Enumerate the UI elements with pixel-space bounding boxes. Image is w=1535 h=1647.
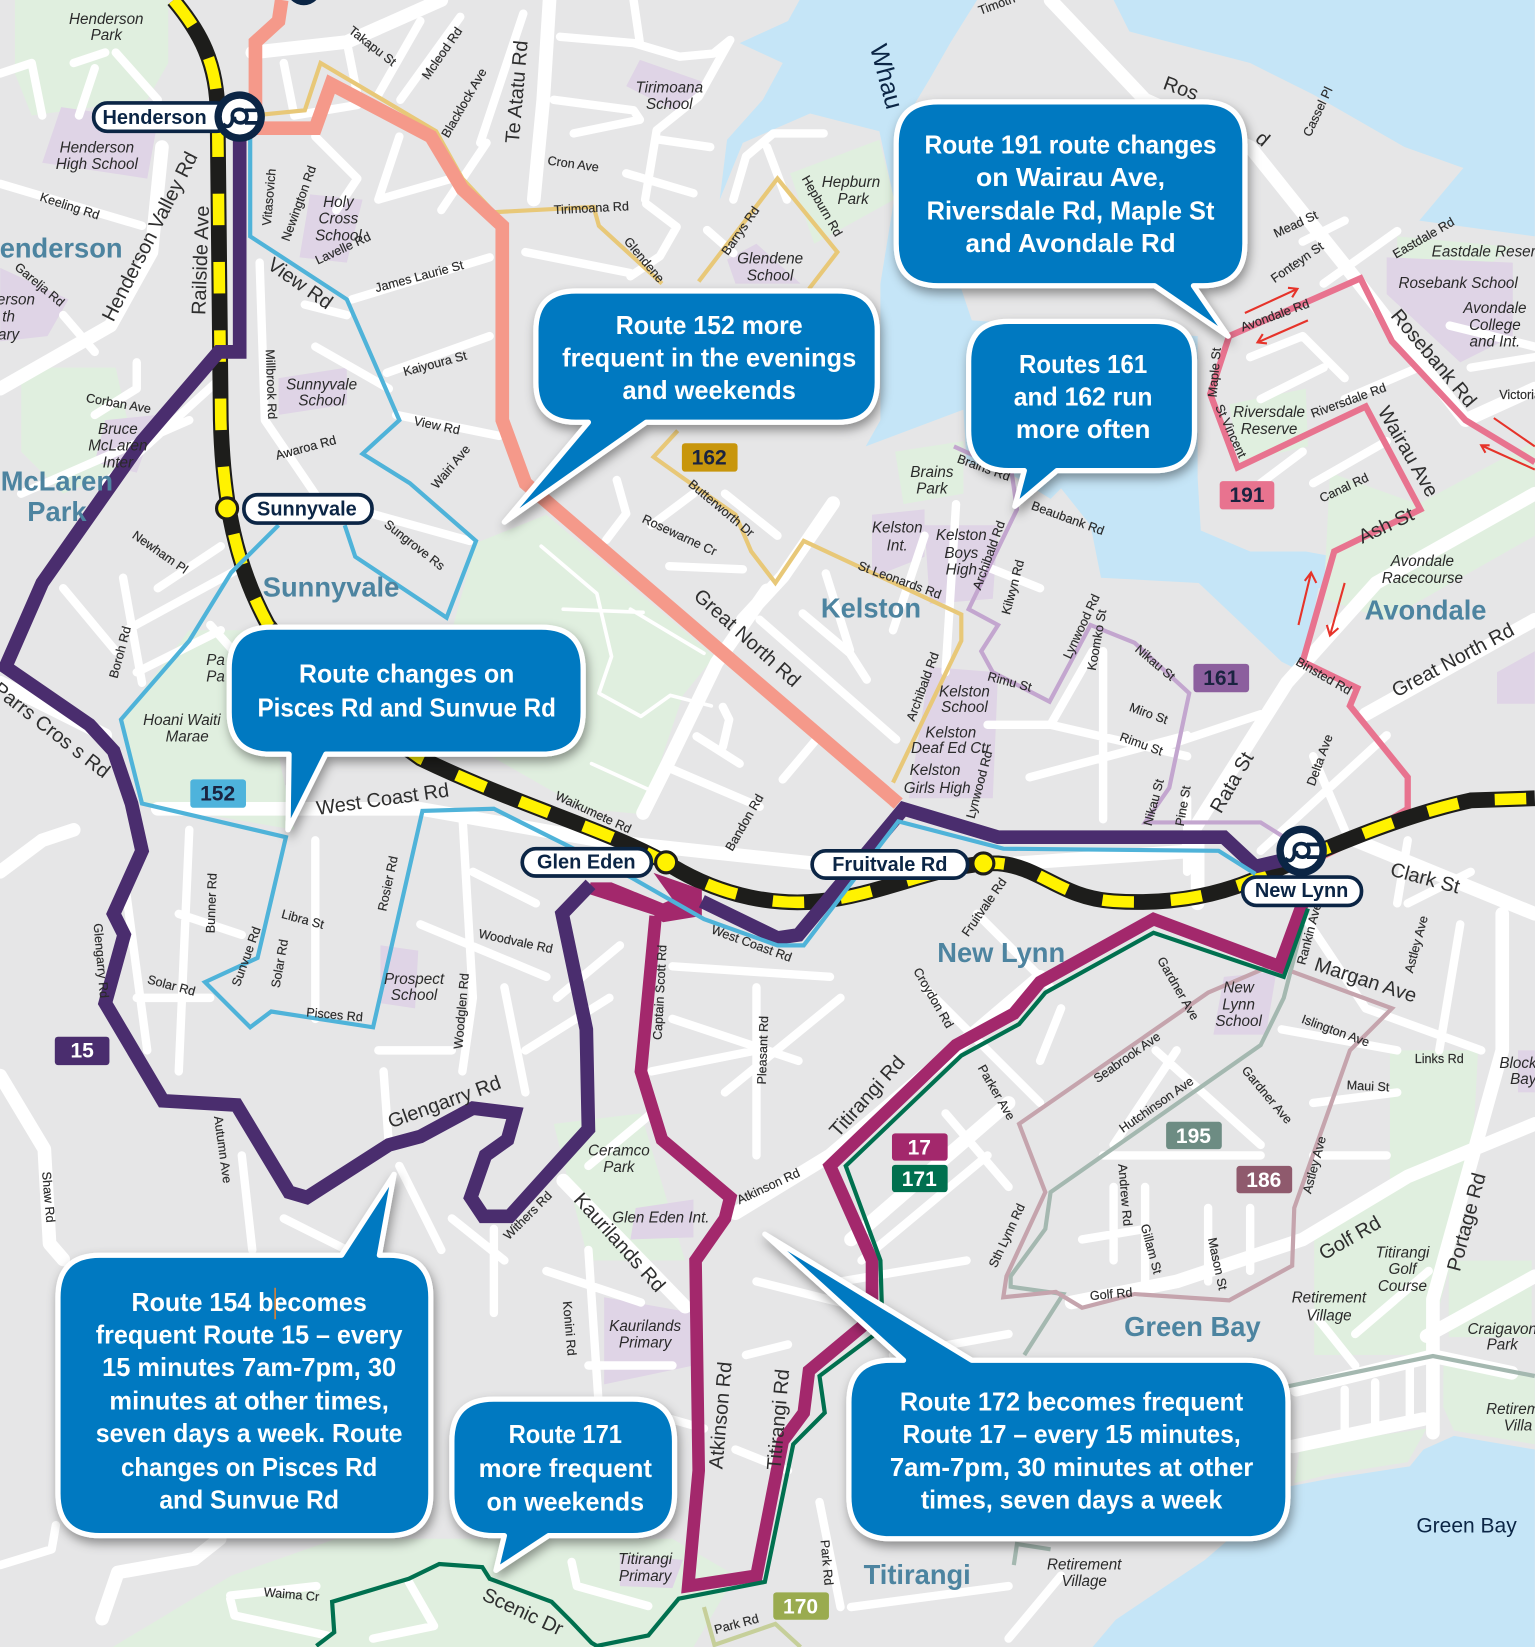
school and park labels: Park <box>603 1159 636 1176</box>
major road labels: Great North Rd <box>1388 619 1518 702</box>
road labels: Barrys Rd <box>719 204 762 258</box>
callout: route 154 becomes route 15: seven days a week. Route <box>96 1420 402 1448</box>
Great North Rd route line <box>255 0 898 804</box>
school and park labels: Lynn <box>1222 996 1255 1013</box>
road labels: Lavelle Rd <box>313 230 373 267</box>
road labels: Konini Rd <box>560 1301 579 1356</box>
suburb names: Titirangi <box>864 1559 971 1590</box>
callout: routes 161 and 162 <box>969 321 1194 506</box>
school and park labels: Girls High <box>904 780 971 797</box>
major road labels: Margan Ave <box>1312 954 1419 1007</box>
road labels: Parker Ave <box>975 1062 1018 1123</box>
school and park labels: School <box>747 267 794 284</box>
major road labels: Rata St <box>1206 748 1259 817</box>
road labels: Blacklock Ave <box>439 66 490 140</box>
school and park labels: Park <box>91 27 123 44</box>
route 15 line <box>5 137 1301 1216</box>
railway line <box>174 0 1535 902</box>
route 191 line <box>1210 278 1535 856</box>
road labels: Koomko St <box>1085 608 1109 672</box>
road labels: Butterworth Dr <box>686 477 757 540</box>
station: Glen Eden <box>522 849 677 876</box>
route 162 line <box>252 63 961 783</box>
school and park labels: School <box>941 699 988 716</box>
callout: route 172 becomes route 17: times, seven days a week <box>921 1486 1223 1514</box>
road labels: Nikau St <box>1141 777 1167 827</box>
road labels: Atkinson Rd <box>735 1166 802 1207</box>
major road labels: Clark St <box>1388 859 1463 899</box>
school and park labels: Int. <box>887 537 908 554</box>
station: New Lynn: New Lynn <box>1255 880 1348 902</box>
route number badges: 170 <box>783 1595 818 1618</box>
road labels: Gardner Ave <box>1154 954 1202 1023</box>
road labels: Takapu St <box>346 23 399 69</box>
station: Henderson <box>94 91 265 142</box>
school and park labels: Tirimoana <box>636 79 703 96</box>
road labels: Mason St <box>1205 1236 1230 1292</box>
route number badges: 161 <box>1203 667 1239 690</box>
school and park labels: Boys <box>944 545 979 562</box>
station: Sunnyvale <box>217 495 372 523</box>
school and park labels: Kelston <box>936 527 987 544</box>
station: New Lynn <box>1243 826 1361 905</box>
callout: route 171 <box>452 1399 675 1570</box>
suburb names: Green Bay <box>1124 1311 1261 1342</box>
school and park labels: High <box>946 562 977 579</box>
road labels: Boroh Rd <box>107 625 134 680</box>
road labels: Rankin Ave <box>1294 901 1324 966</box>
road labels: Eastdale Rd <box>1390 215 1457 261</box>
road labels: Pleasant Rd <box>755 1016 771 1085</box>
road labels: Glengarry Rd <box>91 923 111 999</box>
road labels: Keeling Rd <box>38 190 101 222</box>
road labels: Pine St <box>1173 784 1194 827</box>
road labels: St Vincent <box>1212 402 1249 460</box>
road labels: Islington Ave <box>1300 1012 1371 1050</box>
road labels: Binsted Rd <box>1293 655 1354 698</box>
school and park labels: Villa <box>1504 1418 1532 1435</box>
school and park labels: Avondale <box>1390 553 1454 570</box>
school and park labels: Primary <box>619 1335 673 1352</box>
major road labels: Portage Rd <box>1443 1171 1491 1274</box>
road labels: Lynwood Rd <box>964 749 995 820</box>
school and park labels: Glendene <box>737 251 803 268</box>
route number badges: 195 <box>1176 1125 1211 1148</box>
callout: route 171: Route 171 <box>509 1421 622 1449</box>
road labels: Riversdale Rd <box>1309 381 1388 421</box>
major road labels: Rosebank Rd <box>1386 305 1481 412</box>
callout: route 171: more frequent <box>479 1455 652 1483</box>
road labels: Shaw Rd <box>39 1171 57 1223</box>
station: Sunnyvale: Sunnyvale <box>257 499 357 521</box>
school and park labels: School <box>1215 1013 1262 1030</box>
road labels: Nikau St <box>1132 642 1178 684</box>
school and park labels: Kelston <box>872 520 923 537</box>
road labels: Waikumete Rd <box>553 789 633 836</box>
road labels: Glendene <box>621 235 667 285</box>
suburb names: Kelston <box>821 593 921 624</box>
route 17 line <box>588 873 1303 1586</box>
callout: route 154 becomes route 15: Route 154 becomes <box>131 1289 367 1317</box>
school and park labels: College <box>1469 317 1521 334</box>
road labels: Links Rd <box>1415 1052 1464 1066</box>
route number badges <box>55 443 1292 1620</box>
road labels: Millbrook Rd <box>263 349 279 420</box>
school and park labels: Kelston <box>910 762 960 779</box>
callout: routes 161 and 162: Routes 161 <box>1019 351 1147 379</box>
major road labels: Golf Rd <box>1315 1212 1385 1265</box>
road labels: Sunvue Rd <box>229 925 264 988</box>
school and park labels: Village <box>1306 1307 1352 1324</box>
school and park labels: Craigavon <box>1468 1321 1535 1338</box>
callout: route 154 becomes route 15: minutes at other times, <box>109 1388 389 1416</box>
school and park labels: Kaurilands <box>609 1318 681 1335</box>
road labels: Archibald Rd <box>970 519 1008 592</box>
school and park labels: Prospect <box>384 971 445 988</box>
major road labels: Ros <box>1160 72 1201 105</box>
road labels: Archibald Rd <box>904 650 942 723</box>
callout: route 154 becomes route 15: frequent Route 15 – every <box>96 1321 403 1349</box>
major road labels: Titirangi Rd <box>763 1368 794 1471</box>
school and park labels: School <box>298 392 345 409</box>
road labels: Gardner Ave <box>1239 1064 1295 1127</box>
road labels: Hepburn Rd <box>799 173 845 239</box>
callout: route 152: and weekends <box>623 377 796 405</box>
road labels: Rimu St <box>1118 730 1165 759</box>
road labels: Sungrove Rs <box>381 517 447 573</box>
major road labels: Titirangi Rd <box>826 1052 910 1142</box>
school and park labels: McLaren <box>88 438 147 455</box>
road labels: Rosewarne Cr <box>640 512 719 559</box>
road labels: Croydon Rd <box>910 965 956 1031</box>
road labels: Waima Cr <box>263 1585 320 1604</box>
road labels: Captain Scott Rd <box>651 944 670 1040</box>
school and park labels: Inter <box>103 454 134 471</box>
road labels: Hutchinson Ave <box>1117 1074 1196 1136</box>
callout: route 172 becomes route 17 <box>765 1234 1288 1539</box>
callout: route 152: frequent in the evenings <box>562 345 856 373</box>
major road labels: Atkinson Rd <box>705 1361 737 1470</box>
callout: route 154 becomes route 15: changes on Pisces Rd <box>121 1454 377 1482</box>
road labels: Bandon Rd <box>723 792 766 853</box>
major road labels: Great North Rd <box>689 585 804 692</box>
road labels: Wairi Ave <box>429 442 473 492</box>
road labels: Mcleod Rd <box>419 25 465 82</box>
road labels: Awaroa Rd <box>274 433 338 463</box>
road labels: Pisces Rd <box>306 1005 363 1024</box>
major road labels: West Coast Rd <box>315 780 450 820</box>
station: Fruitvale Rd: Fruitvale Rd <box>832 854 947 876</box>
school and park labels: Hoani Waiti <box>143 712 221 729</box>
callout: Pisces Rd and Sunvue Rd route changes: Route changes on <box>299 661 514 689</box>
school and park labels: Avondale <box>1462 300 1526 317</box>
road labels: West Coast Rd <box>709 923 794 965</box>
route number badges: 191 <box>1229 484 1265 507</box>
road labels: Corban Ave <box>85 391 152 416</box>
callout: routes 161 and 162: more often <box>1016 416 1150 444</box>
school and park labels: Deaf Ed Ctr <box>911 740 991 757</box>
school and park labels: Pa <box>206 652 225 669</box>
major road labels: Railside Ave <box>188 205 214 315</box>
road labels: Maple St <box>1206 347 1224 398</box>
school and park labels: Holy <box>323 194 355 211</box>
callout: routes 161 and 162: and 162 run <box>1014 383 1152 411</box>
major road labels: Whau <box>864 41 908 112</box>
road labels: Gillam St <box>1138 1222 1165 1276</box>
road labels: Fruitvale Rd <box>959 876 1009 939</box>
major road labels: d <box>1251 127 1274 151</box>
road labels: Andrew Rd <box>1115 1163 1135 1227</box>
major road labels: Green Bay <box>1416 1515 1517 1538</box>
road labels: Newington Rd <box>279 164 319 243</box>
road labels: Garelja Rd <box>12 260 67 309</box>
school and park labels: Park <box>1487 1337 1519 1354</box>
school and park labels: Marae <box>166 729 209 746</box>
callout: route 191 <box>896 102 1245 336</box>
suburb names: New Lynn <box>937 937 1065 968</box>
route number badges: 17 <box>908 1136 931 1159</box>
route 186 line <box>1003 961 1392 1308</box>
major road labels: Te Atatu Rd <box>502 40 533 144</box>
route number badges: 152 <box>200 782 235 805</box>
suburb names: Sunnyvale <box>263 572 399 603</box>
school and park labels: Park <box>916 481 949 498</box>
road labels: Kaiyoura St <box>402 348 469 379</box>
callout: route 191: Riversdale Rd, Maple St <box>927 198 1215 226</box>
callout: route 191: and Avondale Rd <box>965 230 1176 258</box>
road labels: Avondale Rd <box>1239 297 1311 334</box>
major road labels: Kaurilands Rd <box>569 1189 669 1297</box>
road labels: Solar Rd <box>146 972 197 999</box>
road labels: Miro St <box>1127 700 1170 727</box>
callout: Pisces Rd and Sunvue Rd route changes: Pisces Rd and Sunvue Rd <box>258 694 556 722</box>
school and park labels: Glen Eden Int. <box>612 1210 710 1227</box>
road labels: Cron Ave <box>547 154 600 175</box>
road labels: Golf Rd <box>1089 1285 1133 1303</box>
road labels: Beaubank Rd <box>1029 499 1106 538</box>
school and park labels: Kelston <box>925 724 976 741</box>
school and park labels: School <box>646 96 693 113</box>
station: Fruitvale Rd <box>812 851 994 878</box>
road labels: Kilwyn Rd <box>999 558 1027 616</box>
school and park labels: Titirangi <box>618 1551 673 1568</box>
road labels: Solar Rd <box>269 938 291 989</box>
route 170 line <box>704 1607 801 1647</box>
route 152 line <box>121 137 1255 1027</box>
route 195 line <box>1011 924 1535 1565</box>
suburb names: enderson <box>0 232 123 263</box>
callout: route 191: on Wairau Ave, <box>976 164 1165 192</box>
route 171 line <box>316 909 1308 1646</box>
road labels: Brains Rd <box>955 452 1012 484</box>
school and park labels: Retirement <box>1047 1556 1122 1573</box>
school and park labels: School <box>315 228 362 245</box>
road labels: Delta Ave <box>1304 733 1336 788</box>
road labels: Lynwood Rd <box>1061 592 1103 661</box>
station: Henderson: Henderson <box>103 107 207 129</box>
station: Swanson direction marker <box>286 0 322 5</box>
callout: route 172 becomes route 17: Route 172 becomes frequent <box>900 1389 1244 1417</box>
major road labels: Wairau Ave <box>1373 403 1442 501</box>
callout: route 154 becomes route 15: 15 minutes 7am-7pm, 30 <box>102 1354 396 1382</box>
road labels: View Rd <box>413 414 461 437</box>
callout: route 154 becomes route 15: and Sunvue Rd <box>159 1486 339 1514</box>
school and park labels: Racecourse <box>1382 570 1463 587</box>
school and park labels: Park <box>837 191 870 208</box>
suburb names: Avondale <box>1365 595 1486 626</box>
station: Glen Eden: Glen Eden <box>537 852 636 874</box>
road labels: Park Rd <box>818 1539 836 1586</box>
route 191 direction arrows <box>1245 288 1535 635</box>
school and park labels: Titirangi <box>1375 1244 1430 1261</box>
school and park labels: Rosebank School <box>1398 275 1518 292</box>
road labels: Rosier Rd <box>375 855 401 912</box>
suburb names <box>0 232 1486 1590</box>
callout: route 172 becomes route 17: 7am-7pm, 30 minutes at other <box>890 1454 1253 1482</box>
major road labels: Ash St <box>1355 503 1418 548</box>
major road labels: Henderson Valley Rd <box>98 148 203 325</box>
road labels: Rimu St <box>986 669 1034 695</box>
road labels: Vitasovich <box>260 168 279 226</box>
road labels: Canal Rd <box>1317 471 1371 505</box>
school and park labels: Pa <box>206 669 225 686</box>
water: Whau River, Rosebank and Green Bay <box>720 0 1535 1647</box>
road labels: Fonteyn St <box>1268 239 1327 286</box>
road labels: St Leonards Rd <box>856 559 943 602</box>
route number badges: 171 <box>902 1168 937 1191</box>
school and park labels: Kelston <box>939 683 990 700</box>
school and park labels: Village <box>1061 1573 1107 1590</box>
road labels: Sth Lynn Rd <box>986 1202 1028 1270</box>
road labels: Tirimoana Rd <box>553 199 629 217</box>
road labels: James Laurie St <box>374 258 466 295</box>
school and park labels: Retirement <box>1292 1289 1367 1306</box>
school and park labels: Golf <box>1388 1261 1418 1278</box>
major road labels: Scenic Dr <box>479 1584 567 1641</box>
road labels: Woodglen Rd <box>451 973 472 1050</box>
route 161 line <box>954 446 1297 846</box>
suburb names: McLaren <box>1 466 113 497</box>
school and park labels: and Int. <box>1469 334 1520 351</box>
school and park labels: Reserve <box>1241 421 1297 438</box>
school and park labels: Cross <box>319 211 359 228</box>
route number badges: 186 <box>1246 1169 1281 1192</box>
callout: Pisces Rd and Sunvue Rd route changes <box>229 627 583 830</box>
major road labels: Glengarry Rd <box>385 1072 504 1133</box>
school and park labels: Ceramco <box>588 1142 650 1159</box>
callout: route 152 <box>504 291 877 522</box>
school and park labels: Riversdale <box>1233 404 1305 421</box>
route number badges: 15 <box>70 1040 94 1063</box>
road labels: Bunner Rd <box>203 873 220 934</box>
road labels: Mead St <box>1272 208 1320 241</box>
callout: route 191: Route 191 route changes <box>925 131 1217 159</box>
road labels: Maui St <box>1346 1078 1390 1094</box>
road labels: Cassel Pl <box>1300 85 1336 139</box>
route number badges: 162 <box>692 446 727 469</box>
school and park labels: th <box>2 308 15 325</box>
road labels: Woodvale Rd <box>477 927 554 956</box>
school and park labels: Course <box>1378 1278 1427 1295</box>
school and park labels: Brains <box>910 464 954 481</box>
school and park labels: School <box>391 987 438 1004</box>
major road labels: View Rd <box>263 254 336 314</box>
road labels: Newham Pl <box>130 528 190 577</box>
suburb names: Park <box>27 496 87 527</box>
road labels: Withers Rd <box>501 1189 555 1243</box>
callout: route 154 becomes route 15 <box>58 1174 431 1536</box>
callout: route 172 becomes route 17: Route 17 – every 15 minutes, <box>902 1421 1241 1449</box>
road labels: Libra St <box>280 907 326 932</box>
road labels: Astley Ave <box>1402 914 1431 974</box>
school and park labels: Bruce <box>98 421 138 438</box>
road labels: Astley Ave <box>1300 1135 1329 1195</box>
road labels: Seabrook Ave <box>1091 1029 1163 1086</box>
road labels: Autumn Ave <box>211 1115 234 1184</box>
callout: route 152: Route 152 more <box>616 312 803 340</box>
school and park labels: Primary <box>619 1568 673 1585</box>
school and park labels: Sunnyvale <box>286 377 357 394</box>
school and park labels: Henderson <box>69 11 144 28</box>
school and park labels: High School <box>56 156 138 173</box>
callout: route 171: on weekends <box>487 1488 644 1516</box>
school and park labels: New <box>1223 980 1255 997</box>
school and park labels: Henderson <box>60 139 134 156</box>
school and park labels: Hepburn <box>822 174 880 191</box>
road labels: Park Rd <box>713 1612 760 1637</box>
